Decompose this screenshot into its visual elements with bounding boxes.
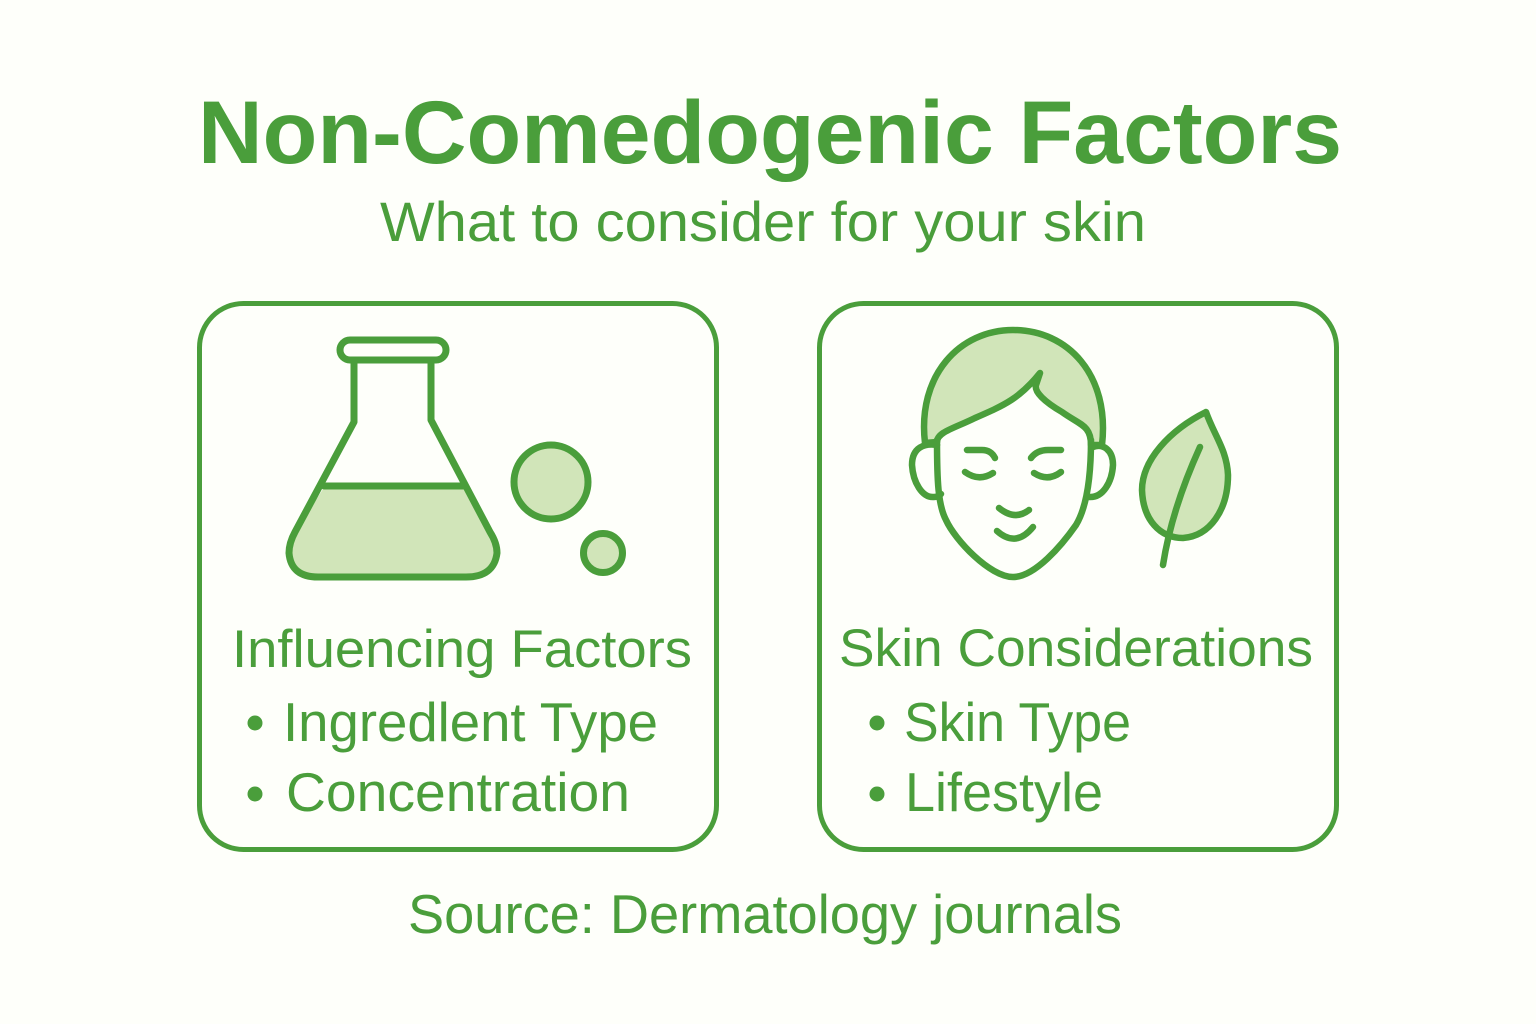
heading: skin considerations: Skin Considerations (839, 619, 1313, 678)
icon: leaf (1142, 412, 1228, 565)
panel: skin considerations (820, 304, 1336, 850)
list item: lifestyle: Lifestyle (905, 761, 1103, 823)
panel border (820, 304, 1336, 850)
panel: influencing factors (200, 304, 716, 850)
subtitle: What to consider for your skin (380, 190, 1146, 253)
list item: skin type: Skin Type (904, 691, 1131, 753)
heading: influencing factors: Influencing Factors (232, 620, 692, 679)
list item: ingredient type: Ingredlent Type (283, 691, 658, 753)
panel border (200, 304, 716, 850)
source note: Source: Dermatology journals (408, 883, 1122, 945)
list item: concentration: Concentration (286, 761, 630, 823)
icon: face (912, 330, 1113, 577)
icon: flask with bubbles (289, 340, 622, 577)
title: Non-Comedogenic Factors (198, 82, 1342, 182)
